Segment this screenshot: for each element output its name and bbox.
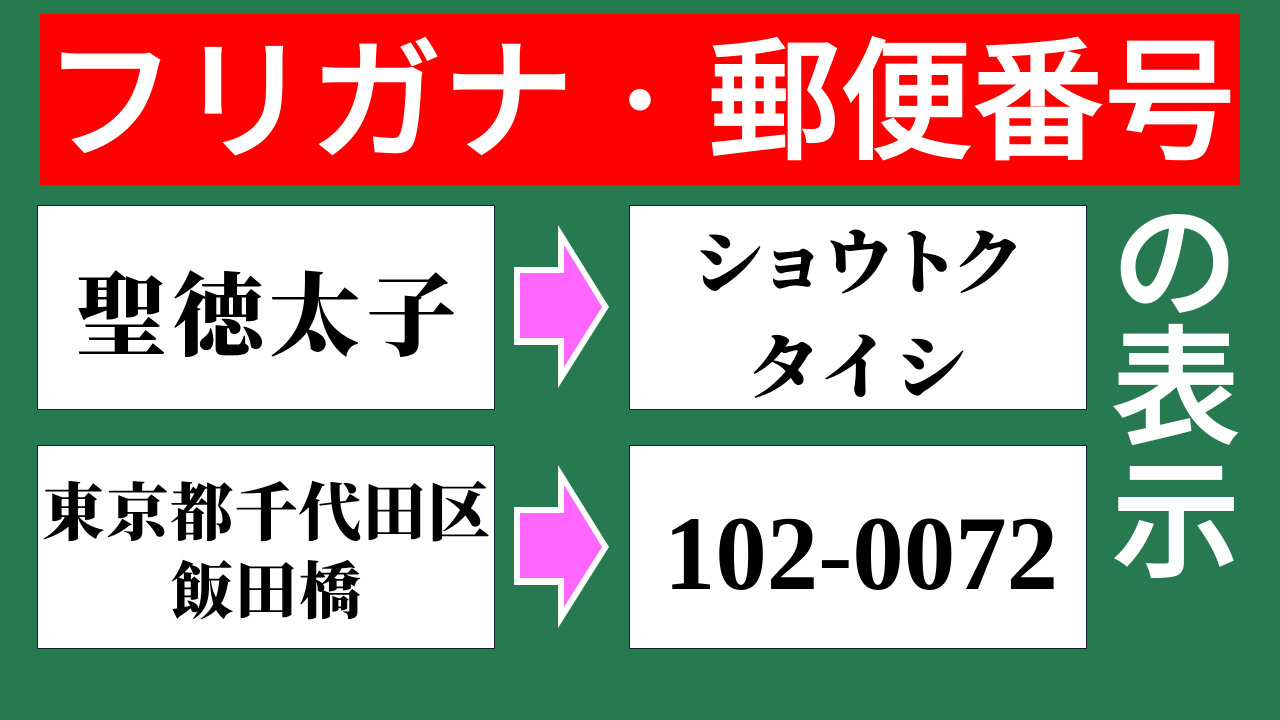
arrow: address to postal code: [514, 465, 609, 628]
vertical heading: の表示: [1112, 193, 1240, 594]
panel: address: 飯田橋: [171, 558, 361, 627]
title banner: フリガナ: [44, 29, 574, 176]
panel: furigana result: タイシ: [748, 329, 966, 409]
vertical heading: の表示: 表: [1112, 318, 1240, 461]
title banner: ・: [598, 56, 682, 150]
title banner: 郵便番号: [708, 29, 1236, 176]
vertical heading: の表示: 示: [1112, 451, 1240, 594]
vertical heading: の表示: の: [1112, 193, 1238, 334]
panel: postal code result: [630, 446, 1086, 648]
panel: 聖徳太子 kanji name: [38, 206, 494, 410]
panel: address: [38, 446, 494, 648]
title banner: [40, 14, 1240, 185]
panel: postal code result: 102-0072: [664, 495, 1058, 612]
panel: furigana result: [630, 206, 1086, 410]
panel: 聖徳太子 kanji name: 聖徳太子: [76, 267, 457, 368]
panel: address: 東京都千代田区: [42, 479, 490, 549]
panel: furigana result: ショウトク: [692, 226, 1024, 304]
arrow: name to furigana: [514, 225, 609, 388]
